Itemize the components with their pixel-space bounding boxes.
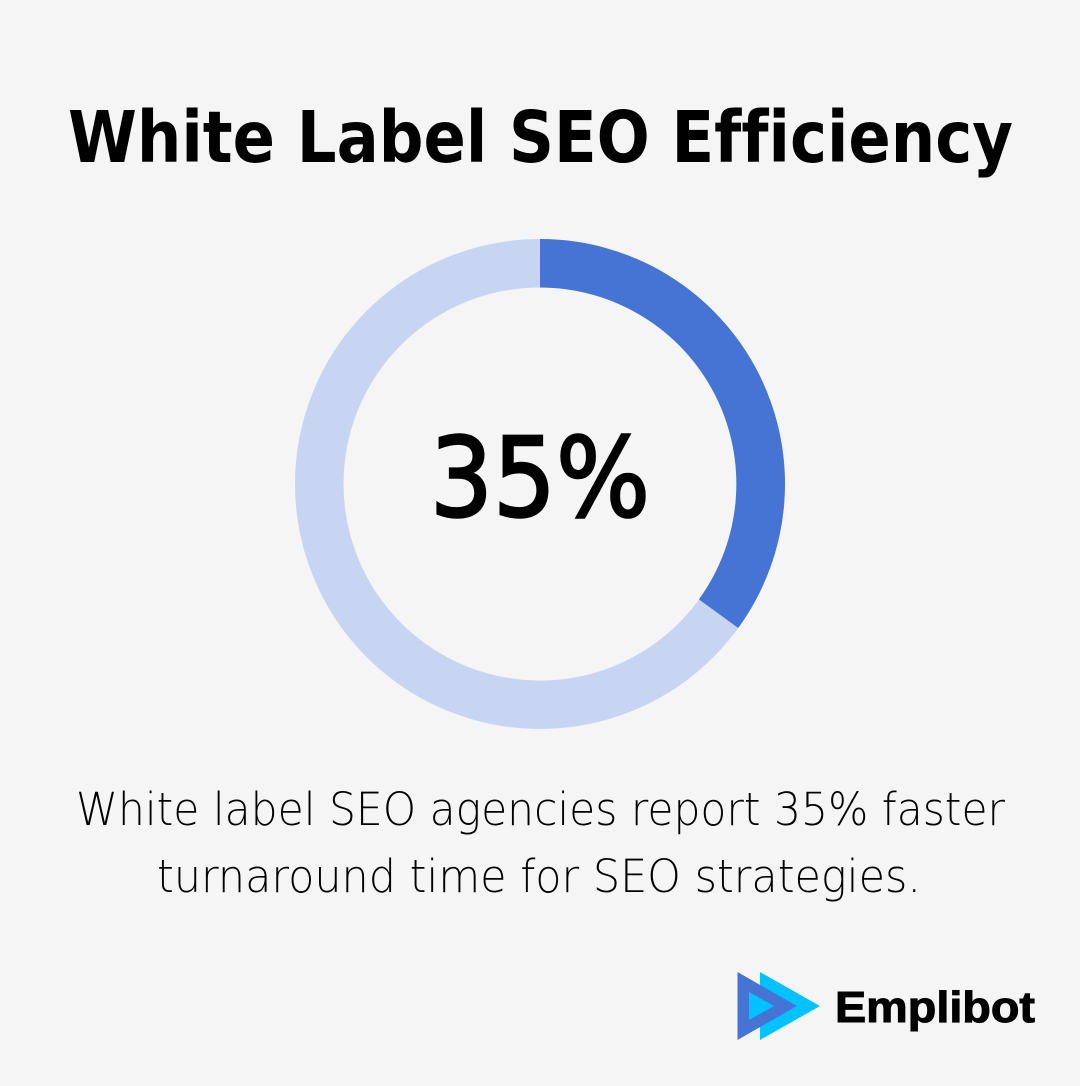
brand name: Emplibot: [835, 983, 1035, 1032]
description: White label SEO agencies report 35% faster: [76, 783, 1005, 836]
description: [76, 783, 1005, 903]
donut chart: 35%: [319, 239, 785, 705]
donut value segment: [540, 239, 785, 628]
icon: play triangles: [738, 972, 820, 1040]
center value: 35%: [430, 414, 650, 542]
donut track: [319, 263, 761, 705]
brand logo: [738, 972, 1035, 1040]
description: turnaround time for SEO strategies.: [157, 850, 921, 903]
